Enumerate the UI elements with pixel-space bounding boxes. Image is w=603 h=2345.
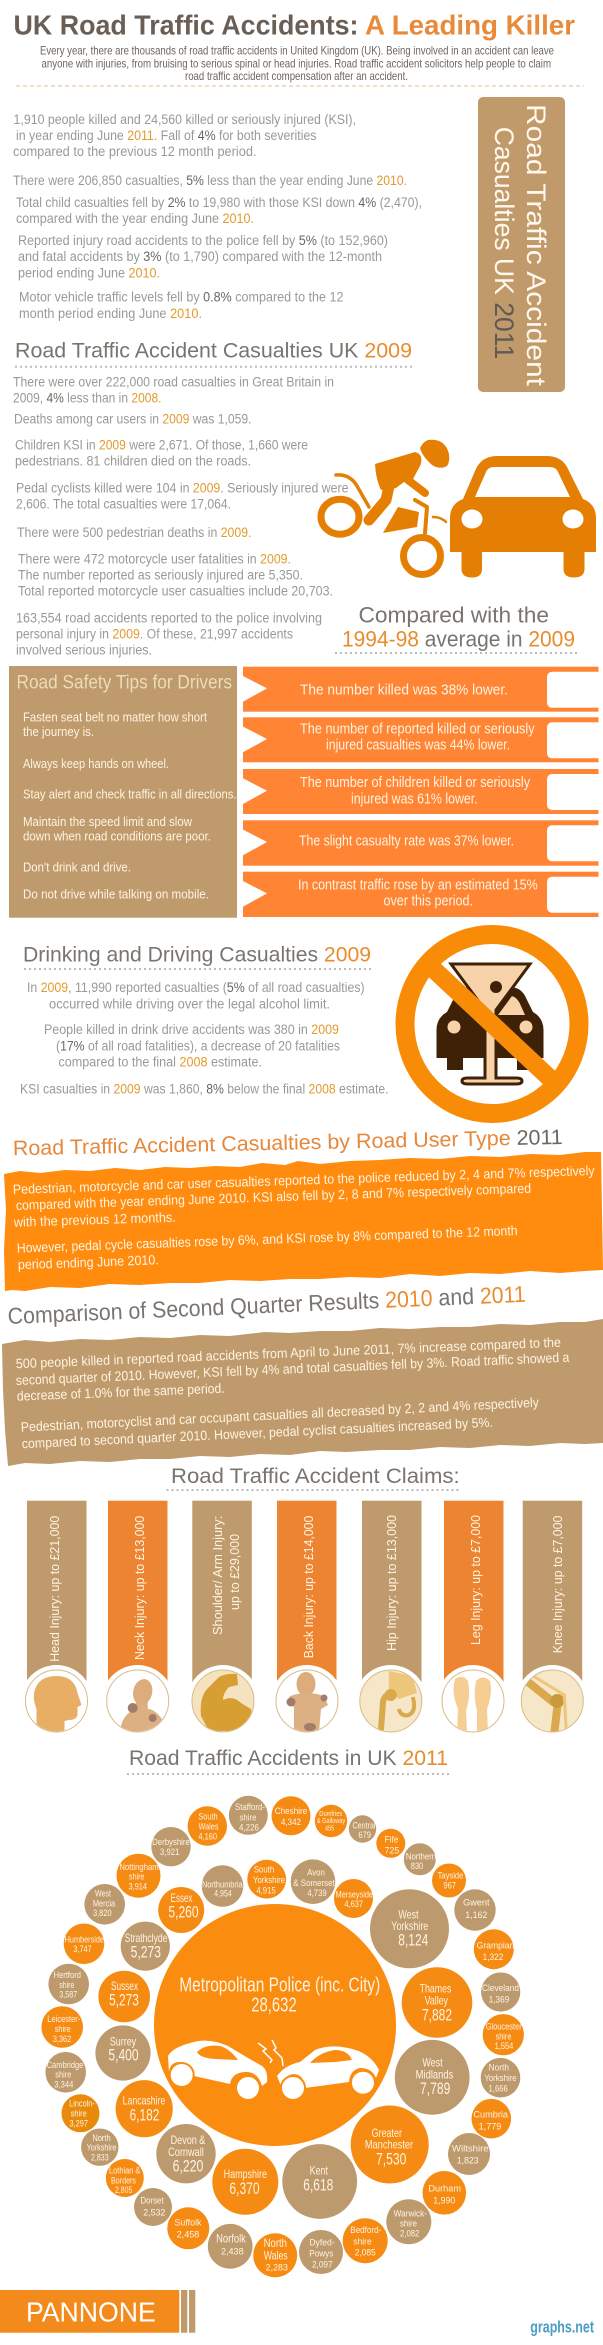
- claim: knee injury: [520, 1500, 584, 1732]
- bubble: Staffordshire: [229, 1796, 268, 1835]
- tips list: Stay alert and check traffic in all directions.: [23, 787, 236, 802]
- bubble: Strathclyde: Strathclyde: [125, 1931, 168, 1945]
- bubble: Strathclyde: [121, 1922, 170, 1971]
- bubble: Cambridgeshire: Cambridge: [47, 2060, 83, 2071]
- bubble: West Yorkshire: [370, 1889, 449, 1968]
- bubble: Lothian and Borders: Lothian &: [109, 2166, 141, 2177]
- text block: 2009 statistics: There were over 222,000 road casualties in Great Britain in: [13, 375, 334, 390]
- panel: road safety tips: [9, 666, 237, 918]
- bubble: South Wales: Wales: [198, 1821, 219, 1832]
- panel: vertical title: Road Traffic Accident: [521, 104, 551, 387]
- text block: 2009 statistics: [13, 375, 348, 657]
- heading: compared with 1994-98: [342, 602, 575, 652]
- bubble: Hampshire: 6,370: [229, 2179, 260, 2198]
- icon part: car: [450, 456, 596, 578]
- tips list: Do not drive while talking on mobile.: [23, 886, 209, 901]
- bubble: Lothian and Borders: 2,805: [115, 2185, 132, 2196]
- panel: second quarter comparison: [2, 1319, 603, 1466]
- bubble: Northern: 830: [411, 1861, 423, 1872]
- bubble: Devon and Cornwall: [156, 2124, 216, 2183]
- bubble: Central: 679: [358, 1830, 371, 1841]
- bubble: Lincolnshire: 3,297: [69, 2119, 88, 2130]
- bubble: Grampian: 1,322: [483, 1952, 503, 1963]
- bubble: Bedfordshire: [343, 2218, 388, 2263]
- bubble: South Yorkshire: South: [254, 1865, 274, 1876]
- bubble: Lincolnshire: Lincoln-: [69, 2099, 95, 2110]
- bubble: Grampian: Grampian: [477, 1941, 514, 1952]
- claim: shoulder and arm injury: up to £29,000: [227, 1534, 242, 1610]
- text block: drinking and driving: In 2009, 11,990 reported casualties (5% of all road casualties): [27, 980, 365, 995]
- bubble: West Midlands: Midlands: [416, 2067, 453, 2081]
- bubble: Avon and Somerset: Avon: [307, 1867, 325, 1878]
- bubble: Wiltshire: 1,823: [457, 2156, 479, 2167]
- footer logo: PANNONE: PANNONE: [26, 2297, 156, 2328]
- bubble: Warwickshire: 2,082: [400, 2229, 419, 2240]
- heading: claims: Road Traffic Accident Claims:: [171, 1465, 460, 1488]
- bubble: North Yorkshire (left): 2,833: [91, 2152, 109, 2163]
- bubble: Sussex: Sussex: [111, 1979, 138, 1993]
- claim: leg injury: Leg Injury: up to £7,000: [468, 1515, 483, 1645]
- bubble: Warwickshire: [386, 2199, 431, 2244]
- bubble: Northumbria: Northumbria: [202, 1880, 243, 1891]
- bubble: North Wales: Wales: [264, 2248, 288, 2262]
- bubble: Lothian and Borders: [106, 2159, 144, 2197]
- panel: road user type: However, pedal cycle casualties rose by 6%, and KSI rose by 8% compared to the 12 month: [17, 1223, 518, 1256]
- bubble: Devon and Cornwall: Cornwall: [168, 2145, 204, 2159]
- banner: killed or seriously injured: [243, 717, 603, 762]
- claim: neck injury: Neck Injury: up to £13,000: [132, 1516, 147, 1660]
- bubble: Cumbria: [472, 2099, 511, 2138]
- text block: 2011 statistics: There were 206,850 casualties, 5% less than the year ending June 2010.: [13, 173, 407, 188]
- bubble: Merseyside: [334, 1879, 373, 1918]
- heading: second quarter comparison: Comparison of Second Quarter Results 2010 and 2011: [7, 1281, 526, 1329]
- text block: 2009 statistics: Total reported motorcycle user casualties include 20,703.: [18, 583, 333, 598]
- text block: 2009 statistics: 163,554 road accidents reported to the police involving: [16, 610, 322, 625]
- bubble: Sussex: 5,273: [109, 1991, 139, 2010]
- icon: colliding cars: [168, 2040, 379, 2100]
- bubble: South Yorkshire: [247, 1860, 286, 1899]
- bubble: Cumbria: 1,779: [479, 2121, 501, 2132]
- title: [14, 10, 575, 40]
- bubble: Greater Manchester: 7,530: [376, 2149, 406, 2168]
- claim: hip injury: Hip Injury: up to £13,000: [384, 1515, 399, 1651]
- icon: feet: [454, 1677, 491, 1732]
- bubble: Dorset: Dorset: [140, 2196, 164, 2207]
- bubble: West Midlands: [395, 2040, 470, 2115]
- bubble: Hertfordshire: 3,587: [59, 1989, 77, 2000]
- bubble: Staffordshire: shire: [240, 1813, 256, 1824]
- bubble: Cleveland: [481, 1972, 520, 2012]
- claim: hip injury: [359, 1500, 422, 1732]
- title: A Leading Killer: [365, 10, 575, 40]
- claim: neck injury: [106, 1500, 170, 1732]
- bubble: North Yorkshire (right): [481, 2058, 520, 2098]
- banner: children: [243, 769, 603, 814]
- bubble: Gwent: Gwent: [463, 1898, 490, 1909]
- text block: 2009 statistics: involved serious injuries.: [16, 642, 152, 657]
- bubble: Dumfries and Galloway: 455: [325, 1825, 334, 1832]
- bubble: Fife: 725: [385, 1846, 399, 1857]
- heading: compared with 1994-98: 1994-98 average in 2009: [342, 627, 575, 652]
- panel: road user type: [4, 1152, 603, 1291]
- bubble: Bedfordshire: 2,085: [355, 2248, 376, 2259]
- bubble: Dyfed-Powys: 2,097: [312, 2260, 333, 2271]
- text block: 2009 statistics: The number reported as seriously injured are 5,350.: [18, 567, 303, 582]
- bubble: South Wales: [188, 1806, 227, 1846]
- text block: 2011 statistics: period ending June 2010.: [18, 265, 160, 280]
- bubble: Hampshire: Hampshire: [224, 2167, 267, 2181]
- icon part: cyclist: [321, 440, 449, 574]
- intro paragraph: [40, 44, 554, 83]
- intro paragraph: road traffic accident compensation after an accident.: [185, 69, 408, 83]
- bubble: Northern: [404, 1843, 436, 1875]
- bubble: Surrey: [95, 2025, 151, 2081]
- text block: 2009 statistics: Children KSI in 2009 were 2,671. Of those, 1,660 were: [15, 437, 308, 452]
- icon: knee: [524, 1673, 566, 1733]
- bubble: West Yorkshire: Yorkshire: [391, 1919, 429, 1933]
- text block: 2009 statistics: 2,606. The total casualties were 17,064.: [16, 496, 231, 511]
- bubble: Kent: 6,618: [303, 2175, 333, 2194]
- bubble: Tayside: Tayside: [438, 1871, 463, 1882]
- text block: 2011 statistics: 1,910 people killed and 24,560 killed or seriously injured (KSI),: [14, 112, 356, 127]
- bubble: Thames Valley: [402, 1967, 472, 2038]
- bubble: Metropolitan Police: 28,632: [251, 1995, 297, 2017]
- heading: casualties 2009: Road Traffic Accident Casualties UK 2009: [15, 339, 412, 362]
- bubble: Suffolk: 2,458: [177, 2229, 199, 2240]
- bubble: Kent: [282, 2144, 357, 2219]
- claim: shoulder and arm injury: [192, 1500, 254, 1732]
- bubble: Leicestershire: 3,362: [53, 2034, 71, 2045]
- bubble: Greater Manchester: Manchester: [365, 2138, 413, 2152]
- bubble: Suffolk: [167, 2207, 209, 2249]
- bubble: Strathclyde: 5,273: [131, 1943, 161, 1962]
- bubble: Avon and Somerset: 4,739: [307, 1888, 327, 1899]
- bubble: West Mercia: [84, 1884, 125, 1925]
- text block: 2011 statistics: Reported injury road accidents to the police fell by 5% (to 152,960): [18, 233, 388, 248]
- text block: drinking and driving: (17% of all road fatalities), a decrease of 20 fatalities: [56, 1038, 340, 1053]
- text block: 2009 statistics: personal injury in 2009. Of these, 21,997 accidents: [16, 626, 293, 641]
- bubble: Fife: Fife: [385, 1834, 398, 1845]
- bubble: Essex: [158, 1887, 204, 1933]
- bubble: Gloucestershire: 1,554: [495, 2041, 513, 2052]
- bubble: Dumfries and Galloway: Dumfries: [319, 1811, 343, 1818]
- claim: shoulder and arm injury: Shoulder/ Arm Injury:: [210, 1516, 225, 1635]
- heading: compared with 1994-98: Compared with the: [358, 602, 549, 627]
- bubble: Cheshire: Cheshire: [275, 1806, 307, 1817]
- bubble: West Mercia: Mercia: [93, 1898, 116, 1909]
- bubble: Derbyshire: [151, 1827, 191, 1866]
- bubble: Lancashire: 6,182: [130, 2106, 159, 2125]
- bubble: Dyfed-Powys: Dyfed-: [309, 2238, 335, 2249]
- panel: vertical title: [478, 97, 565, 392]
- bubble: Leicestershire: [41, 2006, 83, 2048]
- text block: 2011 statistics: month period ending June 2010.: [19, 306, 202, 321]
- bubble: Thames Valley: Thames: [420, 1982, 451, 1996]
- bubble: South Wales: South: [198, 1811, 218, 1822]
- text block: 2011 statistics: [13, 112, 422, 321]
- bubble: Dorset: [134, 2188, 172, 2226]
- icon: head: [34, 1676, 82, 1732]
- bubble: West Mercia: West: [95, 1889, 111, 1900]
- bubble: West Midlands: 7,789: [420, 2079, 450, 2098]
- bubble: Thames Valley: 7,882: [422, 2005, 452, 2024]
- bubble: Avon and Somerset: [291, 1859, 335, 1904]
- bubble: Norfolk: [208, 2224, 253, 2269]
- bubble: North Yorkshire (right): North: [489, 2063, 509, 2074]
- bubble: Lincolnshire: [62, 2094, 100, 2132]
- bubble: Kent: Kent: [310, 2164, 328, 2178]
- claim: leg injury: [442, 1500, 504, 1732]
- bubble: Central: [349, 1815, 376, 1843]
- panel: second quarter comparison: Pedestrian, motorcyclist and car occupant casualties all decreased by 2, 2 and 4% respectively: [20, 1395, 539, 1435]
- banner: killed or seriously injured: The number of reported killed or seriously: [300, 722, 535, 738]
- bubble: Durham: Durham: [428, 2184, 461, 2195]
- tips list: Fasten seat belt no matter how short: [23, 710, 207, 725]
- bubble: Fife: [376, 1829, 405, 1858]
- bubble: Durham: 1,990: [433, 2196, 455, 2207]
- banner: number killed: The number killed was 38% lower.: [300, 682, 508, 698]
- bubble: Greater Manchester: [351, 2106, 429, 2184]
- bubble: North Yorkshire (right): 1,666: [489, 2083, 508, 2094]
- bubble: Cheshire: [272, 1796, 310, 1835]
- tips list: the journey is.: [23, 724, 94, 739]
- bubble: Devon and Cornwall: 6,220: [173, 2157, 203, 2176]
- bubble: Central: Central: [352, 1820, 376, 1831]
- bubble: Lancashire: Lancashire: [123, 2094, 166, 2108]
- icon: cyclist hitting car: [321, 440, 596, 578]
- text block: 2009 statistics: Deaths among car users in 2009 was 1,059.: [14, 411, 251, 426]
- banner: children: The number of children killed or seriously: [300, 775, 531, 791]
- bubble: North Wales: 2,283: [266, 2263, 288, 2274]
- text block: 2009 statistics: pedestrians. 81 children died on the roads.: [15, 453, 251, 468]
- text block: drinking and driving: compared to the final 2008 estimate.: [58, 1054, 262, 1069]
- bubble: Derbyshire: 3,921: [160, 1847, 179, 1858]
- banner: traffic rose: In contrast traffic rose by an estimated 15%: [298, 878, 538, 894]
- bubble: Suffolk: Suffolk: [174, 2217, 202, 2228]
- bubble: Staffordshire: Stafford-: [235, 1802, 265, 1813]
- bubble: North Yorkshire (left): Yorkshire: [87, 2142, 116, 2153]
- bubble: North Wales: [253, 2233, 297, 2277]
- icon: flexed arm: [201, 1674, 254, 1731]
- banner: slight casualty rate: The slight casualty rate was 37% lower.: [299, 833, 514, 849]
- bubble: Metropolitan Police: [154, 1904, 396, 2146]
- bubble: Essex: Essex: [171, 1891, 192, 1905]
- bubble chart: accidents by police force: [41, 1796, 524, 2277]
- icon: no drinking and driving: [405, 934, 579, 1114]
- banner: killed or seriously injured: injured casualties was 44% lower.: [326, 738, 510, 754]
- bubble: Lothian and Borders: Borders: [111, 2175, 136, 2186]
- bubble: West Mercia: 3,820: [93, 1908, 112, 1919]
- text block: drinking and driving: KSI casualties in 2009 was 1,860, 8% below the final 2008 estimate.: [20, 1082, 388, 1097]
- bubble: Bedfordshire: Bedford-: [350, 2225, 381, 2236]
- heading: road user type: Road Traffic Accident Casualties by Road User Type 2011: [13, 1126, 563, 1160]
- text block: 2011 statistics: compared with the year ending June 2010.: [16, 211, 254, 226]
- bubble: Dyfed-Powys: Powys: [309, 2249, 334, 2260]
- bubble: Wiltshire: [448, 2133, 490, 2175]
- text block: drinking and driving: occurred while driving over the legal alcohol limit.: [49, 996, 330, 1011]
- text block: 2009 statistics: There were 472 motorcycle user fatalities in 2009.: [18, 551, 291, 566]
- bubble: Gloucestershire: shire: [496, 2031, 511, 2042]
- bubble: Derbyshire: Derbyshire: [152, 1837, 190, 1848]
- panel: road user type: with the previous 12 months.: [13, 1210, 176, 1230]
- bubble: Cleveland: 1,369: [489, 1995, 509, 2006]
- banner: number killed: [243, 667, 603, 712]
- heading: drinking and driving: Drinking and Driving Casualties 2009: [23, 943, 371, 966]
- bubble: Nottinghamshire: [116, 1854, 160, 1898]
- tips list: Maintain the speed limit and slow: [23, 814, 193, 829]
- bubble: Cleveland: Cleveland: [482, 1983, 519, 1994]
- bubble: Leicestershire: Leicester-: [47, 2014, 80, 2025]
- text block: drinking and driving: People killed in drink drive accidents was 380 in 2009: [44, 1022, 339, 1037]
- text block: 2009 statistics: 2009, 4% less than in 2008.: [13, 391, 162, 406]
- claim: back injury: [276, 1500, 338, 1732]
- panel: second quarter comparison: compared to second quarter 2010. However, pedal cyclist casualties increased by 5%.: [21, 1415, 493, 1451]
- panel: second quarter comparison: decrease of 1.0% for the same period.: [17, 1381, 225, 1404]
- panel: road user type: compared with the year ending June 2010. KSI also fell by 2, 8 and 7% respectively compared: [16, 1181, 531, 1213]
- bubble: Durham: [422, 2171, 466, 2215]
- bubble: Warwickshire: shire: [400, 2218, 417, 2229]
- bubble: Dyfed-Powys: [299, 2230, 343, 2274]
- bubble: Humberside: Humberside: [65, 1934, 104, 1945]
- tips list: [23, 710, 236, 901]
- bubble: Devon and Cornwall: Devon &: [171, 2133, 205, 2147]
- bubble: Bedfordshire: shire: [353, 2236, 372, 2247]
- panel: second quarter comparison: 500 people killed in reported road accidents from April to June 2011, 7% increase compared to the: [16, 1335, 561, 1371]
- bubble: Lancashire: [116, 2080, 173, 2137]
- bubble: Surrey: Surrey: [110, 2035, 136, 2049]
- bubble: Cambridgeshire: shire: [55, 2070, 71, 2081]
- claim: head injury: Head Injury: up to £21,000: [47, 1516, 62, 1662]
- tips list: down when road conditions are poor.: [23, 829, 211, 844]
- text block: 2009 statistics: There were 500 pedestrian deaths in 2009.: [17, 525, 252, 540]
- bubble: Thames Valley: Valley: [425, 1994, 448, 2008]
- bubble: West Yorkshire: 8,124: [398, 1931, 428, 1950]
- bubble: Sussex: [98, 1971, 150, 2022]
- bubble: Nottinghamshire: Nottingham: [119, 1862, 159, 1873]
- bubble: Dumfries and Galloway: & Galloway: [317, 1818, 346, 1825]
- bubble: Cambridgeshire: 3,344: [54, 2080, 73, 2091]
- bubble: North Yorkshire (right): Yorkshire: [484, 2073, 517, 2084]
- bubble: Nottinghamshire: 3,914: [129, 1881, 147, 1892]
- text block: drinking and driving: [20, 980, 388, 1097]
- bubble: Northumbria: 4,954: [214, 1889, 232, 1900]
- bubble: Hampshire: [212, 2149, 278, 2215]
- icon: neck mannequin: [121, 1679, 162, 1732]
- text block: 2011 statistics: and fatal accidents by 3% (to 1,790) compared with the 12-month: [18, 249, 382, 264]
- bubble: Merseyside: Merseyside: [336, 1890, 373, 1901]
- bubble: South Wales: 4,160: [198, 1832, 217, 1843]
- bubble: Merseyside: 4,637: [344, 1899, 363, 1910]
- banner: traffic rose: [243, 872, 603, 917]
- bubble: Northumbria: [202, 1865, 243, 1907]
- icon: hip bone: [381, 1671, 417, 1732]
- bubble: Humberside: 3,747: [73, 1944, 92, 1955]
- bubble: West Midlands: West: [422, 2055, 443, 2069]
- banner: children: injured was 61% lower.: [351, 791, 478, 807]
- bubble: Hertfordshire: Hertford: [54, 1970, 81, 1981]
- bubble: Hertfordshire: [48, 1964, 89, 2004]
- bubble: Leicestershire: shire: [55, 2024, 71, 2035]
- bubble: Essex: 5,260: [168, 1903, 199, 1922]
- banner: slight casualty rate: [243, 820, 603, 866]
- footer logo: PANNONE: [0, 2290, 195, 2333]
- bubble: Staffordshire: 4,226: [239, 1823, 259, 1834]
- bubble: Greater Manchester: Greater: [372, 2126, 402, 2140]
- bubble: Wiltshire: Wiltshire: [452, 2143, 489, 2154]
- panel: vertical title: Casualties UK 2011: [489, 127, 519, 359]
- bubble: Grampian: [474, 1929, 514, 1969]
- bubble: Tayside: 967: [443, 1881, 456, 1892]
- bubble: North Yorkshire (left): North: [92, 2133, 111, 2144]
- bubble: North Yorkshire (left): [81, 2128, 119, 2166]
- claim: knee injury: Knee Injury: up to £7,000: [550, 1516, 565, 1653]
- bubble: Cheshire: 4,342: [281, 1817, 301, 1828]
- bubble: Metropolitan Police: Metropolitan Police (inc. City): [179, 1975, 380, 1997]
- bubble: Nottinghamshire: shire: [129, 1871, 144, 1882]
- bubble: Gwent: 1,162: [465, 1910, 487, 1921]
- bubble: Avon and Somerset: & Somerset: [293, 1878, 335, 1889]
- text block: 2009 statistics: Pedal cyclists killed were 104 in 2009. Seriously injured were: [16, 480, 348, 495]
- bubble: Gwent: [454, 1889, 496, 1931]
- bubble: South Yorkshire: 4,915: [256, 1886, 276, 1897]
- bubble: Cumbria: Cumbria: [473, 2109, 509, 2120]
- bubble: South Yorkshire: Yorkshire: [253, 1875, 285, 1886]
- text block: 2011 statistics: Total child casualties fell by 2% to 19,980 with those KSI down 4% (2,470),: [16, 195, 422, 210]
- title: UK Road Traffic Accidents:: [14, 10, 358, 40]
- text block: 2011 statistics: in year ending June 2011. Fall of 4% for both severities: [16, 128, 317, 143]
- bubble: Lincolnshire: shire: [71, 2109, 87, 2120]
- text block: 2011 statistics: Motor vehicle traffic levels fell by 0.8% compared to the 12: [19, 290, 344, 305]
- claim: back injury: Back Injury: up to £14,000: [301, 1516, 316, 1658]
- bubble: Hertfordshire: shire: [59, 1980, 74, 1991]
- icon: back mannequin: [286, 1672, 328, 1732]
- claim: head injury: [25, 1500, 88, 1732]
- banner: traffic rose: over this period.: [384, 894, 473, 910]
- bubble: West Yorkshire: West: [398, 1907, 419, 1921]
- panel: road user type: period ending June 2010.: [18, 1252, 159, 1272]
- bubble: North Wales: North: [264, 2236, 287, 2250]
- bubble: Norfolk: Norfolk: [216, 2232, 247, 2246]
- bubble: Northern: Northern: [406, 1852, 436, 1863]
- heading: UK 2011 accidents: Road Traffic Accidents in UK 2011: [129, 1747, 448, 1770]
- tips heading: Road Safety Tips for Drivers: [16, 673, 232, 694]
- bubble: Dorset: 2,532: [143, 2207, 165, 2218]
- bubble: Norfolk: 2,438: [221, 2247, 244, 2258]
- bubble: Dumfries and Galloway: [315, 1805, 347, 1837]
- bubble: Gloucestershire: [483, 2014, 524, 2055]
- bubble: Tayside: [432, 1864, 466, 1898]
- tips list: Don't drink and drive.: [23, 860, 131, 875]
- bubble: Humberside: [64, 1924, 104, 1964]
- bubble: Gloucestershire: Gloucester: [486, 2022, 522, 2033]
- tips list: Always keep hands on wheel.: [23, 756, 169, 771]
- bubble: Warwickshire: Warwick-: [394, 2208, 427, 2219]
- text block: 2011 statistics: compared to the previous 12 month period.: [13, 144, 256, 159]
- bubble: Cambridgeshire: [45, 2052, 86, 2093]
- bubble: Surrey: 5,400: [108, 2046, 139, 2065]
